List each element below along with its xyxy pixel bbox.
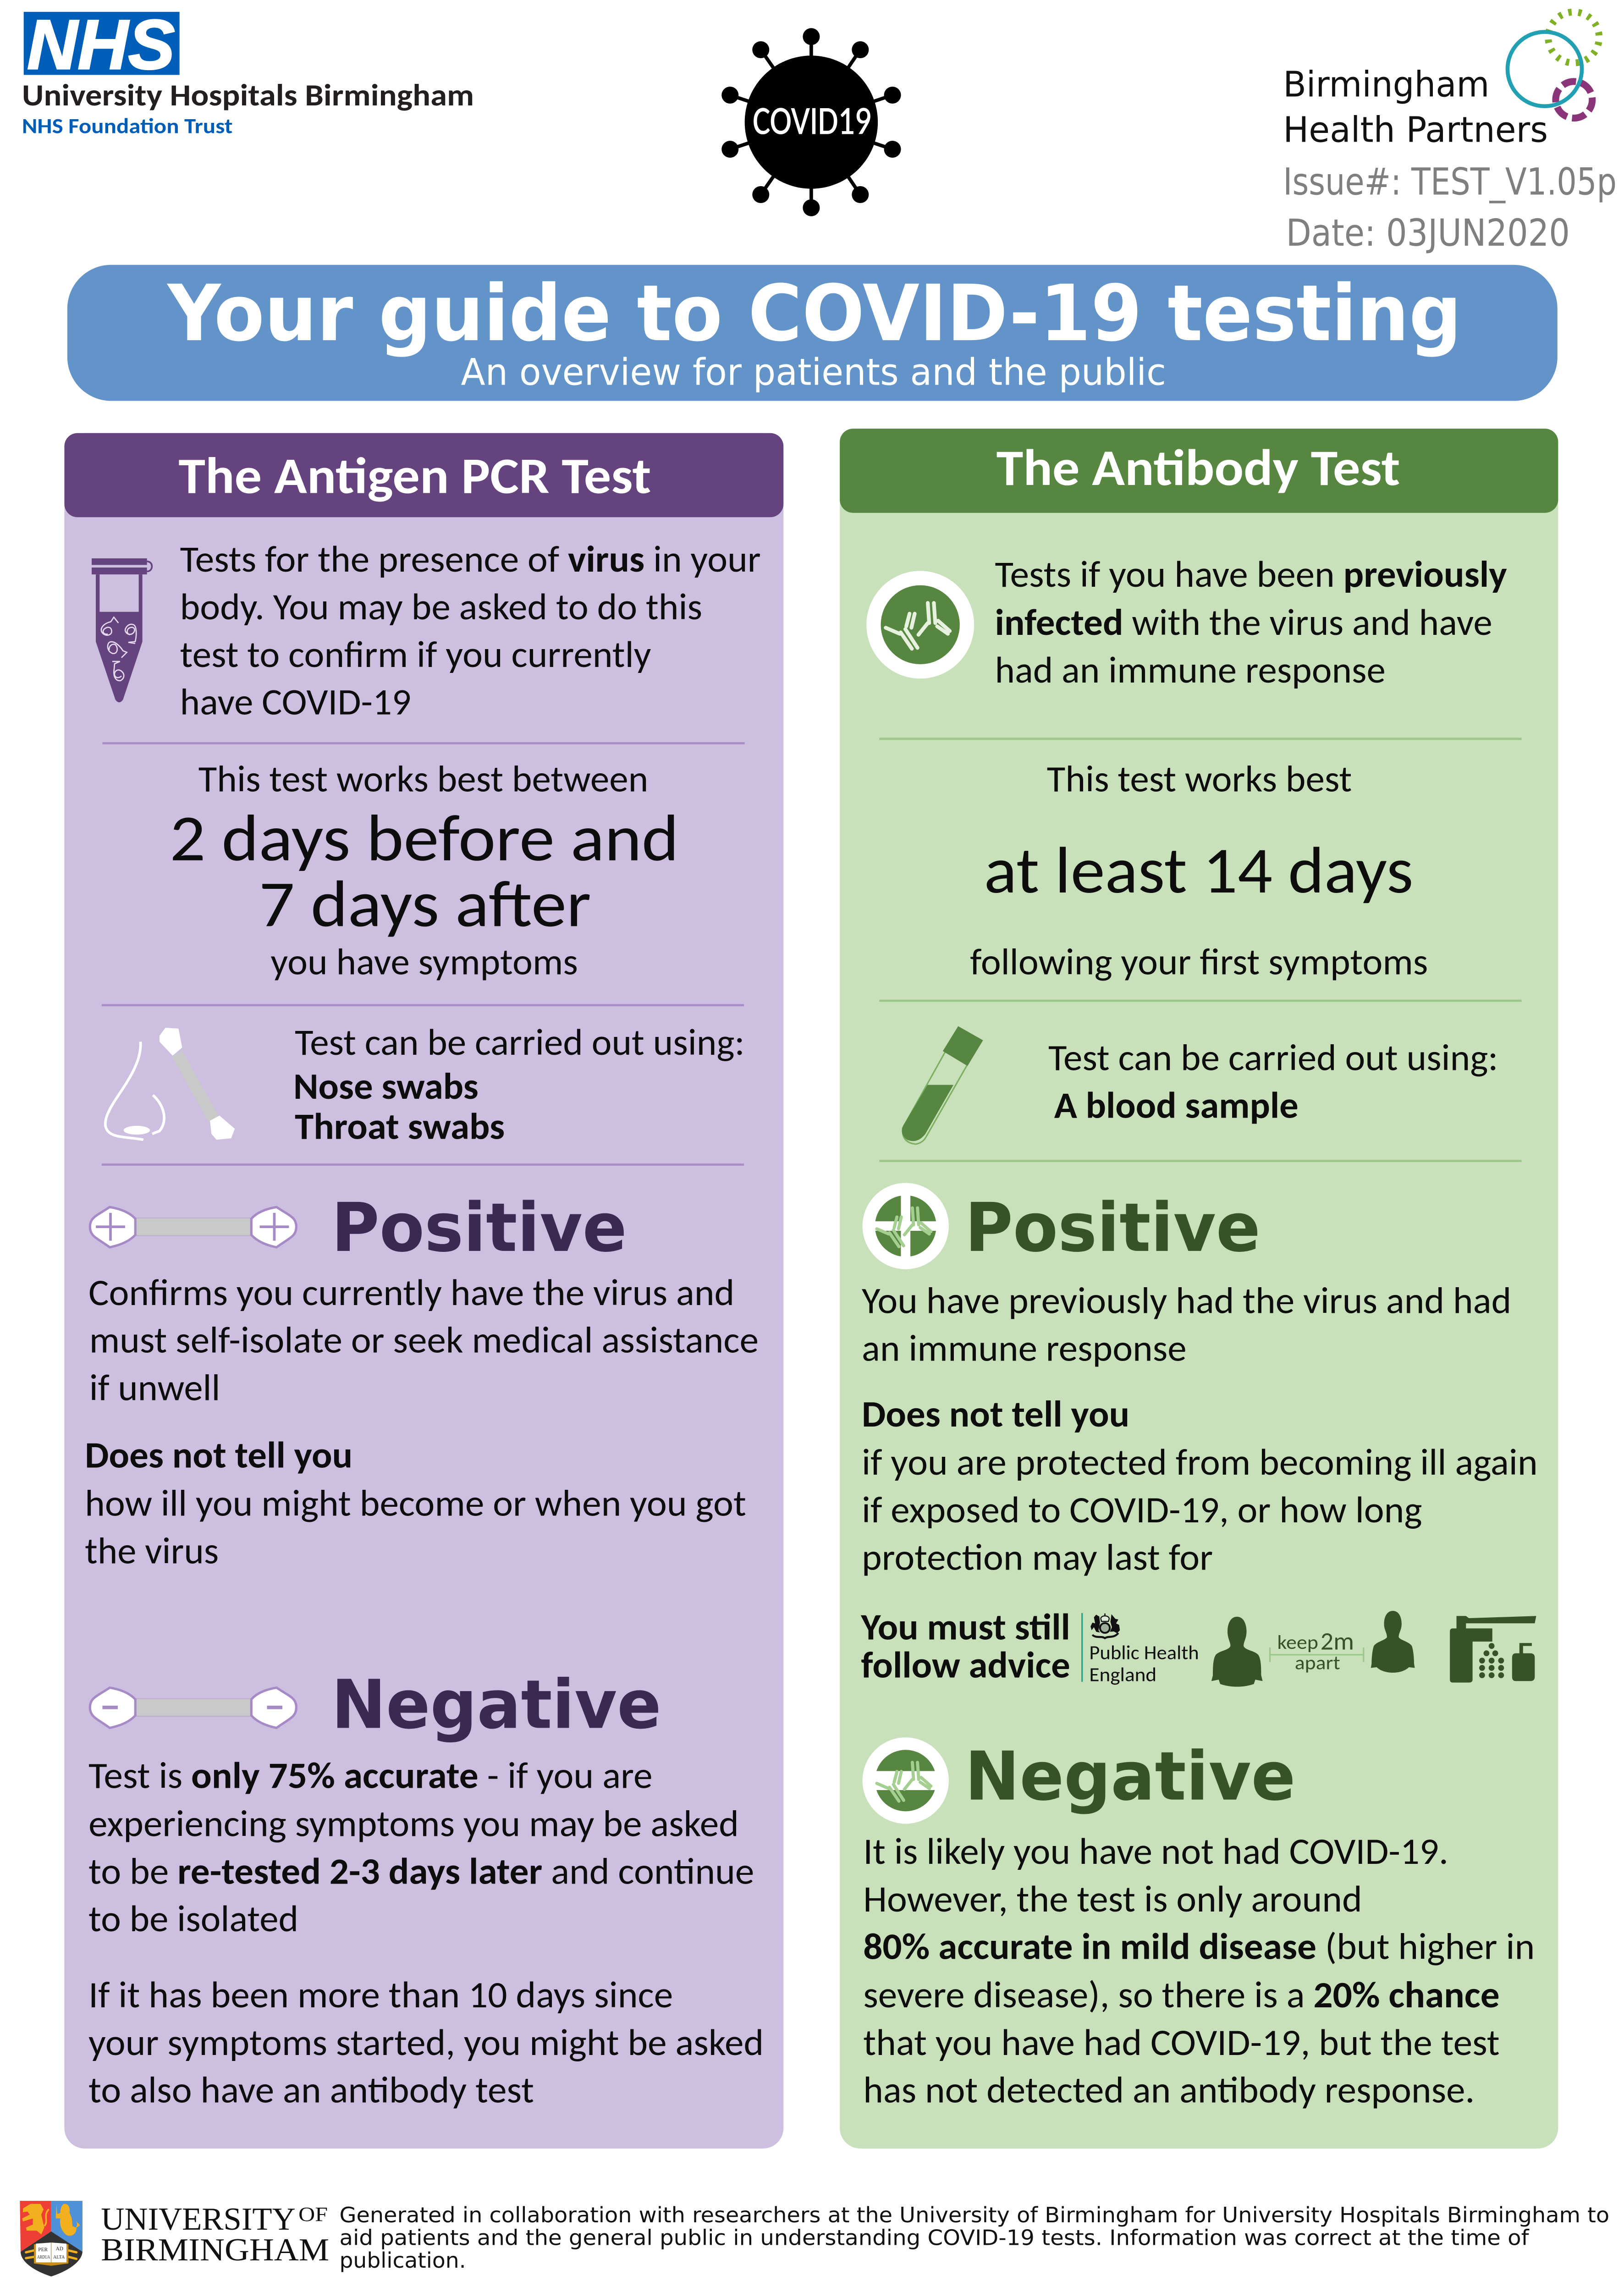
text: you must still follow advice: You must still [860,1604,1070,1649]
heading: negative antibody: Negative [965,1737,1295,1816]
text: antibody intro: Tests if you have been previously [995,551,1507,597]
text: negative antigen: to also have an antibody test [88,2067,534,2113]
logo: NHS University Hospitals Birmingham: University Hospitals Birmingham [22,76,474,114]
text: antigen timing [170,756,679,985]
text: antigen timing: 7 days after [259,863,591,944]
text: antigen intro: body. You may be asked to do this [180,584,702,629]
text: positive antigen: the virus [85,1528,219,1573]
text: antibody intro: infected with the virus and have [995,600,1492,645]
panel: antigen PCR test [64,433,783,2149]
text: negative antigen: your symptoms started, you might be asked [88,2020,764,2065]
text: antigen intro: test to confirm if you currently [180,632,651,677]
text: antigen sample type: Test can be carried out using: [295,1019,745,1065]
text: you must still follow advice: follow advice [861,1642,1070,1687]
icon: blood sample tube [902,1026,983,1144]
text: negative antigen: to be isolated [88,1896,298,1941]
text: negative antigen: to be re-tested 2-3 days later and continue [88,1848,754,1894]
text: negative antibody [863,1829,1535,2113]
text: negative antigen: experiencing symptoms you may be asked [88,1801,739,1846]
icon: negative antibody [863,1737,949,1824]
logo: Birmingham Health Partners [1283,12,1599,151]
icon: keep 2m apart: keep [1277,1630,1318,1654]
logo: University of Birmingham: OF [298,2203,328,2226]
text: you must still follow advice [860,1604,1070,1687]
panel header: antibody: The Antibody Test [996,437,1400,499]
text: positive antigen: if unwell [89,1365,220,1410]
footer text [340,2203,1609,2273]
icon: hand sanitiser [1450,1616,1536,1682]
text: antibody timing: at least 14 days [984,830,1413,910]
icon: university shield [20,2201,83,2276]
icon: antibodies in circle [866,571,974,678]
advice strip [860,1604,1536,1687]
subtitle: An overview for patients and the public [461,351,1166,393]
text: positive antibody: if you are protected from becoming ill again [862,1439,1538,1485]
text: negative antigen: If it has been more than 10 days since [88,1972,673,2017]
logo: NHS University Hospitals Birmingham: NHS Foundation Trust [22,113,233,139]
text: antigen intro: Tests for the presence of virus in your [180,536,761,582]
text: positive antigen [85,1270,759,1573]
icon: university shield: AD [56,2246,63,2252]
text: negative antibody: that you have had COVID-19, but the test [863,2020,1500,2065]
icon: person left [1211,1617,1263,1687]
icon: positive antigen swab [90,1207,296,1247]
text: antigen intro [180,536,761,725]
text: antibody sample type: A blood sample [1054,1082,1299,1128]
icon: positive antibody [863,1183,949,1269]
icon: keep 2m apart: 2m [1321,1626,1354,1657]
logo: Birmingham Health Partners: Health Partners [1283,110,1548,151]
logo: Public Health England [1089,1614,1199,1686]
icon: swab test tube [92,558,152,702]
footer text: Generated in collaboration with researchers at the University of Birmingham for University Hospitals Birmingham to [340,2203,1609,2227]
icon: COVID19 virus [721,28,901,216]
text: positive antigen: Confirms you currently have the virus and [88,1270,734,1315]
title banner [67,265,1558,401]
text: antigen sample type: Nose swabs [293,1063,479,1109]
panel header: antigen [64,433,783,517]
icon: COVID19 virus: COVID19 [753,97,871,145]
text: negative antibody: has not detected an antibody response. [863,2067,1475,2113]
text: positive antibody: if exposed to COVID-19, or how long [862,1487,1422,1532]
text: positive antigen: Does not tell you [85,1432,352,1477]
text: antibody sample type: Test can be carried out using: [1048,1035,1498,1080]
logo: University of Birmingham [20,2201,329,2276]
heading: negative antigen: Negative [331,1665,661,1744]
text: negative antibody: However, the test is only around [863,1876,1362,1922]
text: antibody timing: following your first symptoms [970,939,1428,985]
logo: NHS University Hospitals Birmingham: NHS [27,6,175,84]
icon: keep 2m apart [1270,1626,1364,1675]
issue and date [1283,160,1617,255]
icon: negative antigen swab [90,1688,296,1728]
text: positive antibody: an immune response [862,1325,1187,1371]
text: positive antigen: must self-isolate or seek medical assistance [89,1317,759,1363]
icon: university shield: ALTA [53,2255,65,2260]
text: positive antibody: You have previously had the virus and had [862,1278,1511,1323]
text: antigen sample type [293,1019,745,1149]
icon: keep 2m apart: apart [1295,1651,1340,1675]
text: negative antibody: severe disease), so there is a 20% chance [863,1972,1500,2017]
text: antibody timing [970,756,1428,985]
footer text: publication. [340,2248,466,2273]
text: negative antigen [88,1752,764,2113]
logo: University of Birmingham: BIRMINGHAM [101,2232,329,2268]
panel header: antigen: The Antigen PCR Test [178,445,651,507]
text: antigen intro: have COVID-19 [180,679,411,725]
heading: positive antibody: Positive [965,1189,1261,1267]
text: positive antibody: Does not tell you [862,1391,1129,1437]
logo: Birmingham Health Partners: Birmingham [1283,65,1489,105]
logo: Public Health England: Public Health [1089,1640,1199,1664]
text: antibody intro [995,551,1507,693]
text: antigen timing: 2 days before and [170,798,679,878]
icon: nose and swab [105,1028,235,1140]
text: antibody timing: This test works best [1047,756,1352,802]
text: positive antibody [862,1278,1538,1580]
icon: university shield: ARDUA [37,2255,50,2260]
text: antigen timing: This test works best between [198,756,648,802]
text: antigen timing: you have symptoms [270,939,578,985]
panel header: antibody [840,429,1558,513]
logo: University of Birmingham: UNIVERSITY [101,2201,296,2237]
text: antibody intro: had an immune response [995,647,1386,693]
text: negative antigen: Test is only 75% accurate - if you are [88,1752,653,1798]
footer text: aid patients and the general public in understanding COVID-19 tests. Information was correct at the time of [340,2226,1530,2250]
heading: positive antigen: Positive [331,1189,627,1267]
text: positive antigen: how ill you might become or when you got [85,1481,746,1526]
text: negative antibody: It is likely you have not had COVID-19. [863,1829,1448,1874]
icon: person right [1371,1611,1415,1673]
text: antigen sample type: Throat swabs [295,1104,505,1149]
icon: university shield: PER [38,2247,48,2253]
text: antibody sample type [1048,1035,1498,1128]
logo: Public Health England: England [1089,1662,1156,1686]
text: negative antibody: 80% accurate in mild disease (but higher in [863,1924,1535,1969]
logo: NHS University Hospitals Birmingham [22,6,474,139]
issue and date: Date: 03JUN2020 [1286,211,1570,255]
title: Your guide to COVID-19 testing [167,268,1462,358]
text: positive antibody: protection may last for [862,1535,1213,1580]
panel: antibody test [840,429,1558,2149]
